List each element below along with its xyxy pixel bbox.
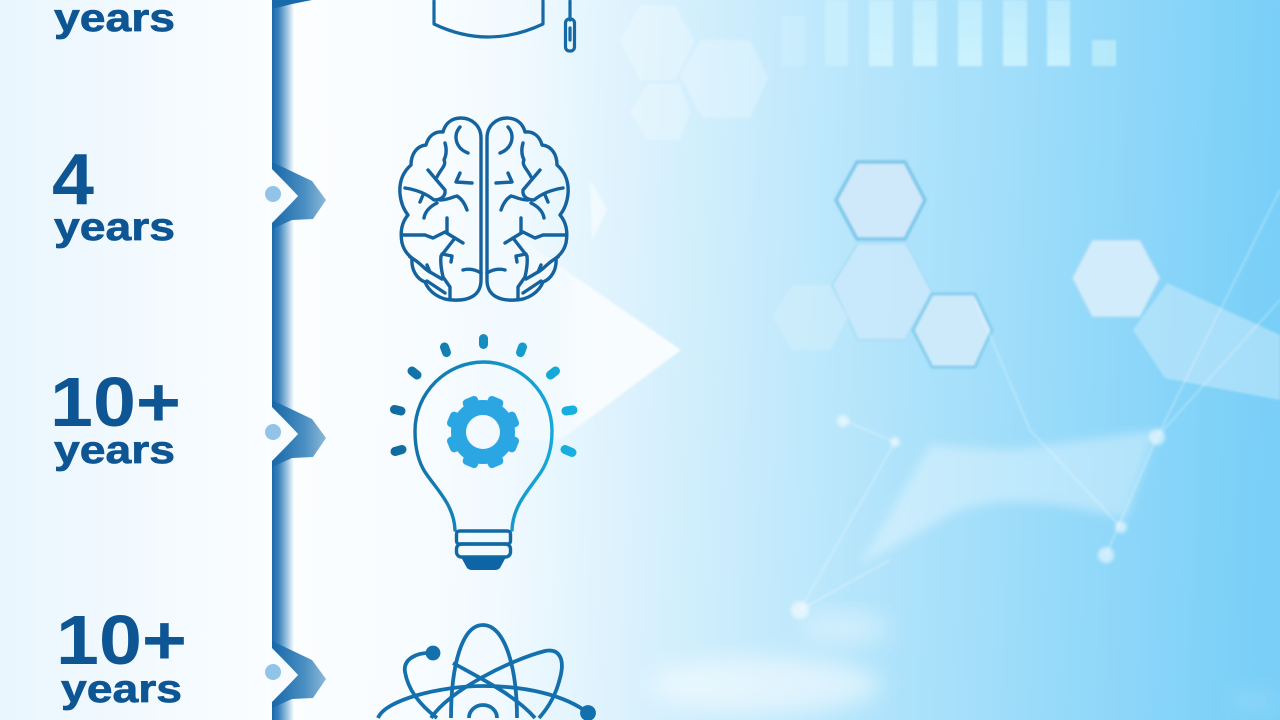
- right hemisphere: [487, 118, 568, 300]
- timeline dot 3: [265, 664, 281, 680]
- rays: [394, 338, 573, 452]
- network lines: [800, 190, 1280, 610]
- network glow band: [860, 430, 1157, 565]
- nucleus ring: [469, 705, 497, 718]
- icon: atom: [378, 625, 594, 719]
- icon: graduation cap: [434, 1, 574, 51]
- left column panel: [0, 0, 272, 720]
- bulb outline: [415, 362, 552, 530]
- left hemisphere: [400, 118, 481, 300]
- gear: [446, 395, 520, 469]
- timeline dot 2: [265, 424, 281, 440]
- label: 4 years: [52, 140, 175, 249]
- chevron: 10+ years second: [271, 641, 326, 708]
- chevron: 10+ years first: [271, 400, 326, 467]
- label: 10+ years: [50, 363, 181, 472]
- label: 10+ years second: years: [61, 668, 182, 711]
- icon: brain: [400, 118, 568, 300]
- label: 4 years: years: [54, 206, 175, 249]
- label: 10+ years second: 10+: [56, 601, 187, 679]
- top bars: [781, 0, 1116, 66]
- decorative background: hexagons and network: [500, 0, 1280, 716]
- top chevron remnant: [272, 0, 312, 8]
- bulb screw base: [456, 531, 510, 557]
- label: 4 years: 4: [52, 140, 94, 220]
- vertical rail: [272, 0, 294, 720]
- soft bottom glow: [650, 612, 1279, 716]
- white pointer shapes: [500, 225, 681, 440]
- chevron: 4 years: [271, 162, 326, 229]
- faint top hexagons: [620, 5, 768, 140]
- icon: light bulb with gear: [394, 338, 573, 570]
- label: 10+ years: years: [54, 429, 175, 472]
- label: 10+ years: 10+: [50, 363, 181, 441]
- timeline rail: [265, 0, 326, 720]
- timeline dot 1: [265, 186, 281, 202]
- label: 10+ years second: [56, 601, 187, 711]
- electron dots: [428, 648, 438, 658]
- network nodes: [791, 415, 1165, 619]
- blue-edged hexagons: [772, 162, 1280, 400]
- bulb tip: [461, 557, 506, 570]
